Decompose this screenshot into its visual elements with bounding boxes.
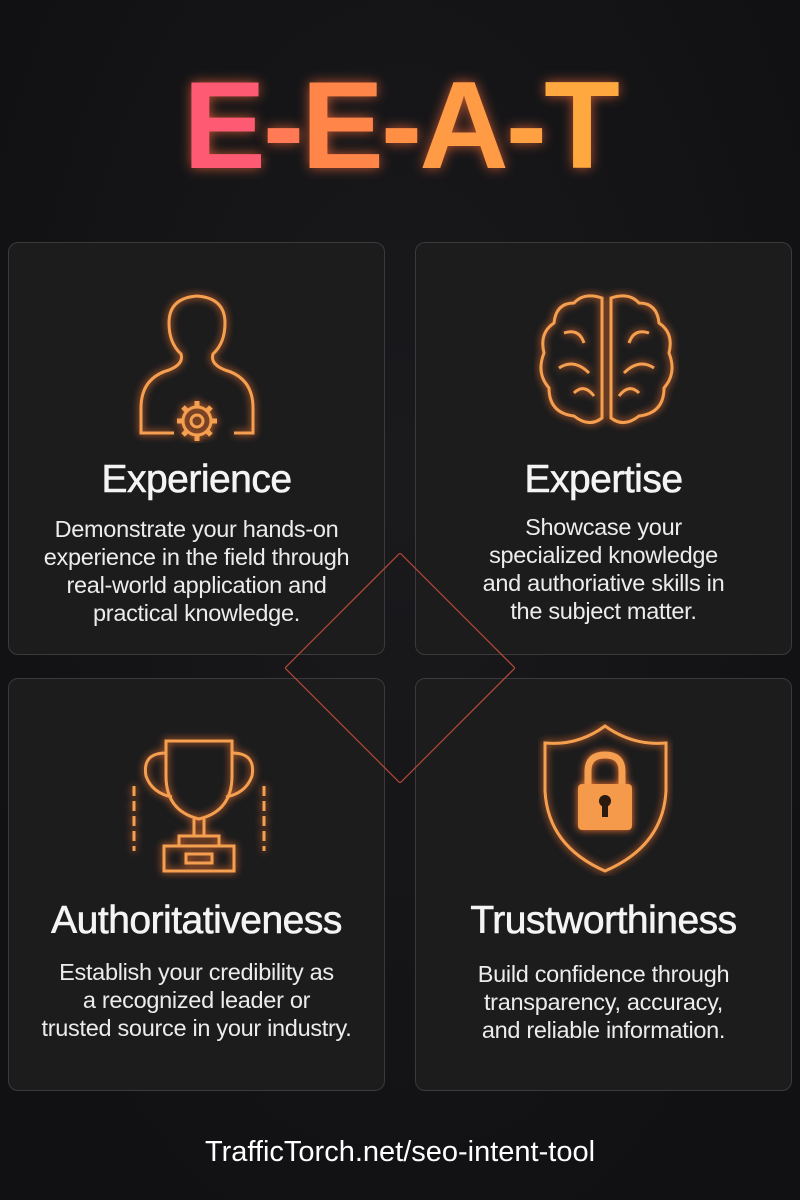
text: expertise desc: Showcase your	[525, 514, 682, 540]
text: experience desc: practical knowledge.	[93, 600, 300, 626]
text: experience desc: Demonstrate your hands-on	[55, 516, 338, 542]
panel: expertise	[415, 242, 792, 655]
title: E-E-A-T	[183, 57, 617, 195]
text: expertise desc: specialized knowledge	[489, 542, 718, 568]
text: experience desc: experience in the field through	[44, 544, 349, 570]
icon: person with gear	[133, 288, 261, 443]
text: experience desc	[44, 516, 349, 626]
diamond connector	[285, 553, 515, 783]
text: trustworthiness desc: transparency, accuracy,	[484, 989, 723, 1015]
text: expertise desc: the subject matter.	[510, 598, 697, 624]
text: trustworthiness desc	[478, 961, 729, 1043]
icon: trophy	[126, 733, 272, 879]
heading: experience: Experience	[101, 458, 292, 501]
panel: authoritativeness	[8, 678, 385, 1091]
text: trustworthiness desc: and reliable information.	[482, 1017, 725, 1043]
heading: authoritativeness: Authoritativeness	[51, 899, 342, 942]
text: authoritativeness desc	[42, 959, 351, 1041]
heading: expertise: Expertise	[524, 458, 683, 501]
panel: trustworthiness	[415, 678, 792, 1091]
text: authoritativeness desc: Establish your credibility as	[59, 959, 334, 985]
text: authoritativeness desc: a recognized leader or	[83, 987, 310, 1013]
heading: trustworthiness: Trustworthiness	[470, 899, 737, 942]
icon: shield with lock	[538, 721, 673, 876]
text: expertise desc: and authoriative skills in	[483, 570, 724, 596]
text: trustworthiness desc: Build confidence through	[478, 961, 729, 987]
text: experience desc: real-world application and	[66, 572, 326, 598]
text: expertise desc	[483, 514, 724, 624]
icon: brain	[534, 288, 679, 430]
footer url: TrafficTorch.net/seo-intent-tool	[205, 1136, 595, 1168]
panel: experience	[8, 242, 385, 655]
text: authoritativeness desc: trusted source in your industry.	[42, 1015, 351, 1041]
